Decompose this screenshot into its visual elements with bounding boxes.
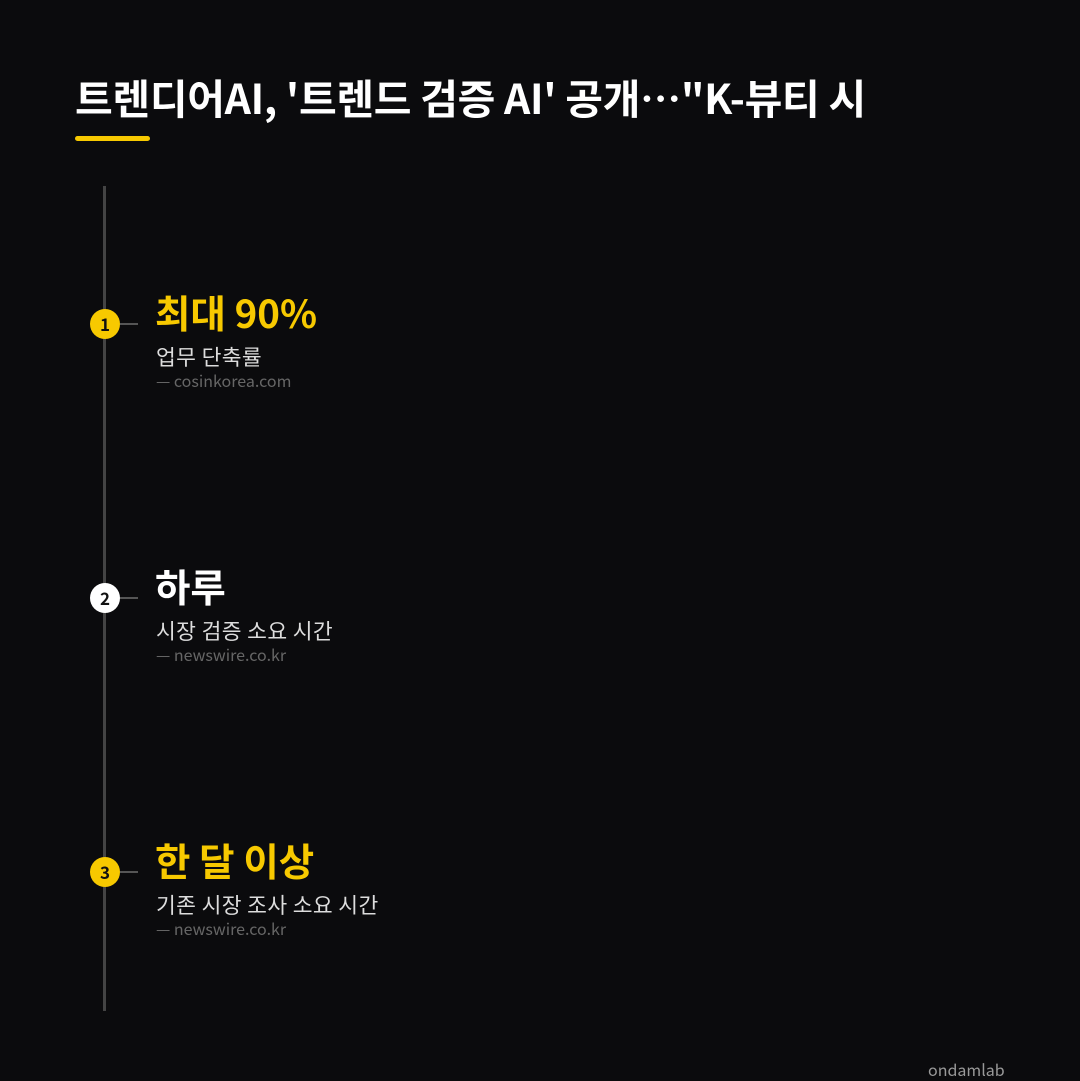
item 2: — newswire.co.kr (156, 642, 286, 666)
item 1: 1 (100, 311, 110, 336)
item 2 (90, 558, 333, 666)
item 1 (90, 284, 317, 392)
title underline (75, 136, 150, 141)
item 3: — newswire.co.kr (156, 916, 286, 940)
item 2: 하루 (155, 558, 226, 614)
title: 트렌디어AI, '트렌드 검증 AI' 공개…"K-뷰티 시 (75, 66, 866, 126)
item 3: 3 (100, 859, 110, 884)
footer: ondamlab (928, 1057, 1005, 1081)
item 3: 기존 시장 조사 소요 시간 (156, 889, 379, 920)
item 1: — cosinkorea.com (156, 368, 291, 392)
timeline line (103, 186, 106, 1011)
item 1: 업무 단축률 (156, 341, 262, 372)
item 2: 시장 검증 소요 시간 (156, 615, 333, 646)
item 2: 2 (100, 585, 110, 610)
item 3 (90, 832, 379, 940)
item 3: 한 달 이상 (155, 832, 314, 888)
item 1: 최대 90% (155, 284, 317, 340)
